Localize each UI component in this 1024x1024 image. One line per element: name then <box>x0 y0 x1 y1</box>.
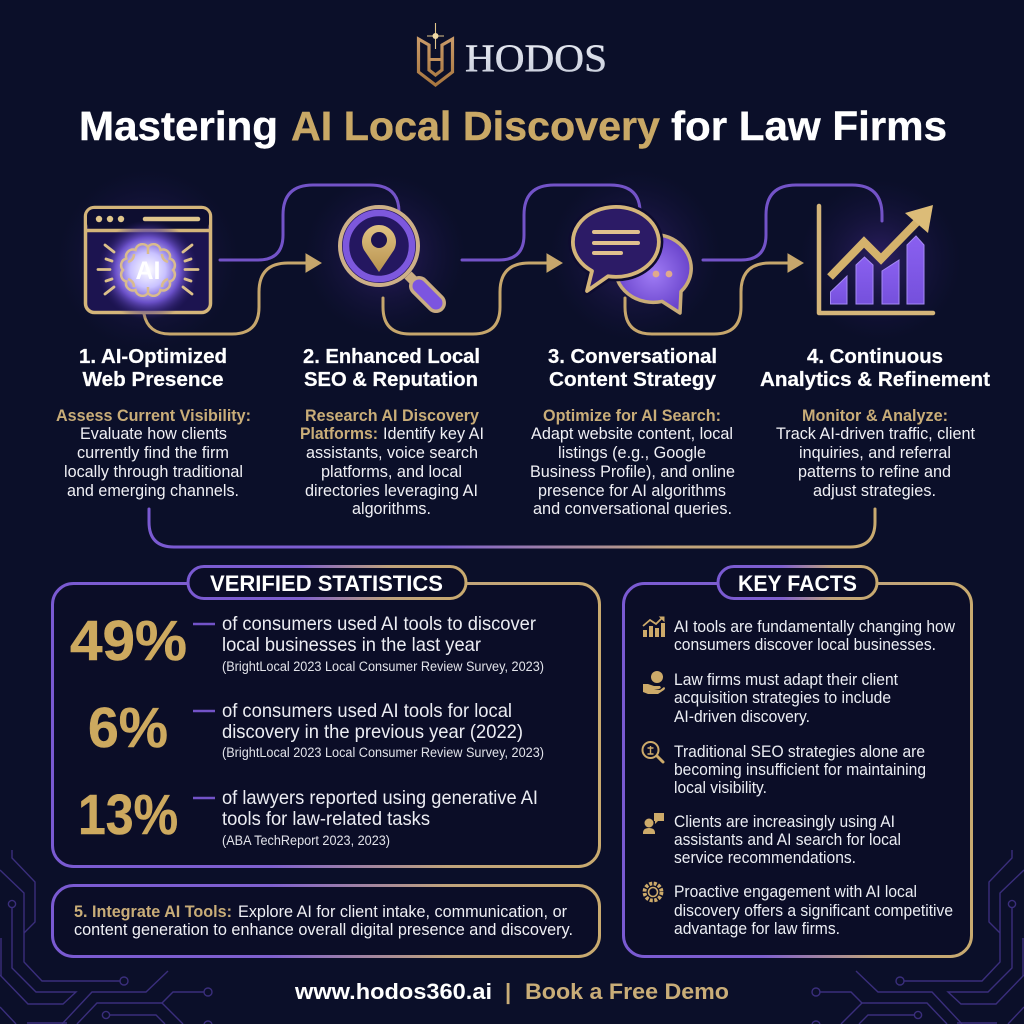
title: Mastering <box>79 103 278 149</box>
brand name: HODOS <box>465 37 607 80</box>
fact 1 <box>674 617 956 654</box>
stat: 6%: of consumers used AI tools for local <box>222 700 512 722</box>
description: patterns to refine and <box>798 462 951 481</box>
connector: bracket joining the steps <box>149 509 875 547</box>
heading pill <box>718 566 877 598</box>
fact 2: Law firms must adapt their client <box>674 670 898 689</box>
fact 1: AI tools are fundamentally changing how <box>674 617 956 636</box>
description: Adapt website content, local <box>531 424 733 443</box>
circuit pattern: right <box>812 850 1024 1024</box>
heading <box>79 345 227 391</box>
logo <box>418 23 607 85</box>
description: Research AI Discovery <box>305 406 480 425</box>
heading: SEO & Reputation <box>304 368 478 391</box>
fact 4: assistants and AI search for local <box>674 830 901 849</box>
description: Identify key AI <box>383 424 484 443</box>
heading pill: KEY FACTS <box>738 571 857 596</box>
icon: growth chart <box>819 205 933 313</box>
footer: Book a Free Demo <box>525 979 729 1004</box>
description: Assess Current Visibility: <box>56 406 251 425</box>
description: currently find the firm <box>77 443 229 462</box>
fact 3: Traditional SEO strategies alone are <box>674 742 925 761</box>
icon: magnifier with scales <box>642 742 663 762</box>
icon: magnifier with location pin <box>340 207 436 303</box>
stat: 49%: (BrightLocal 2023 Local Consumer Review Survey, 2023) <box>222 659 544 674</box>
fact 3: local visibility. <box>674 778 767 797</box>
footer: | <box>505 979 511 1004</box>
panel: integrate AI tools: Explore AI for client intake, communication, or <box>238 902 567 921</box>
heading <box>760 345 990 391</box>
icon: hand holding coin <box>643 671 665 694</box>
description: and conversational queries. <box>533 499 732 518</box>
description <box>300 406 484 518</box>
description: Platforms: <box>300 424 378 443</box>
circuit pattern: left <box>0 850 212 1024</box>
panel: verified statistics <box>52 566 600 866</box>
fact 5: Proactive engagement with AI local <box>674 882 917 901</box>
fact 4: service recommendations. <box>674 848 856 867</box>
description: listings (e.g., Google <box>558 443 706 462</box>
heading: Web Presence <box>82 368 224 391</box>
description <box>530 406 735 518</box>
stat: 49%: of consumers used AI tools to discover <box>222 613 536 635</box>
description: algorithms. <box>352 499 431 518</box>
step 2 text <box>300 345 484 518</box>
description: Monitor & Analyze: <box>802 406 948 425</box>
heading: Content Strategy <box>549 368 717 391</box>
heading pill <box>188 566 466 598</box>
icon: person with speech bubble <box>643 813 664 834</box>
panel: integrate AI tools: content generation to enhance overall digital presence and discovery. <box>74 920 573 939</box>
heading <box>548 345 717 391</box>
footer: www.hodos360.ai <box>294 979 492 1004</box>
heading: 2. Enhanced Local <box>303 345 480 368</box>
description: Track AI-driven traffic, client <box>776 424 975 443</box>
stat: 13%: of lawyers reported using generative AI <box>222 787 538 809</box>
step 3 text <box>530 345 735 518</box>
stat: 6%: (BrightLocal 2023 Local Consumer Review Survey, 2023) <box>222 745 544 760</box>
fact 1: consumers discover local businesses. <box>674 635 936 654</box>
stat: 13%: tools for law-related tasks <box>222 808 430 830</box>
heading: Analytics & Refinement <box>760 368 990 391</box>
stat: 13%: 13% <box>78 783 178 847</box>
fact 3 <box>674 742 926 797</box>
fact 3: becoming insufficient for maintaining <box>674 760 926 779</box>
icon glows <box>58 170 960 350</box>
icon: browser window with AI brain <box>86 208 210 320</box>
icon: browser window with AI brain: AI <box>136 257 160 285</box>
stat: 13%: (ABA TechReport 2023, 2023) <box>222 833 390 848</box>
icon: chat bubbles <box>573 207 691 313</box>
stat: 6% <box>88 696 544 760</box>
connector: step 2 to 3 <box>383 185 640 334</box>
fact 2: acquisition strategies to include <box>674 688 891 707</box>
description: Optimize for AI Search: <box>543 406 721 425</box>
icon: shield mark <box>418 23 452 85</box>
stat: 6%: discovery in the previous year (2022) <box>222 721 523 743</box>
description: locally through traditional <box>64 462 243 481</box>
step 4 text <box>760 345 990 500</box>
panel: integrate AI tools: 5. Integrate AI Tools: <box>74 902 232 921</box>
description: assistants, voice search <box>306 443 478 462</box>
icon: rising bars <box>643 617 665 637</box>
stat: 49%: 49% <box>70 609 187 673</box>
description: presence for AI algorithms <box>538 481 726 500</box>
heading: 4. Continuous <box>807 345 943 368</box>
stat: 6%: 6% <box>88 696 168 760</box>
fact 5 <box>674 882 953 938</box>
fact 2 <box>674 670 898 726</box>
fact 5: advantage for law firms. <box>674 919 840 938</box>
heading <box>303 345 480 391</box>
fact 5: discovery offers a significant competitive <box>674 901 953 920</box>
heading: 1. AI-Optimized <box>79 345 227 368</box>
stat: 49% <box>70 609 544 674</box>
panel: integrate AI tools <box>52 886 600 956</box>
title: AI Local Discovery <box>291 103 660 149</box>
description: adjust strategies. <box>813 481 936 500</box>
title: for Law Firms <box>671 103 947 149</box>
step 1 text <box>56 345 251 500</box>
icon: gear <box>644 884 662 900</box>
footer <box>294 979 729 1004</box>
description <box>56 406 251 500</box>
description: and emerging channels. <box>67 481 239 500</box>
fact 2: AI-driven discovery. <box>674 707 810 726</box>
heading: 3. Conversational <box>548 345 717 368</box>
heading pill: VERIFIED STATISTICS <box>210 571 443 596</box>
title <box>79 103 947 149</box>
description: Evaluate how clients <box>80 424 227 443</box>
description: platforms, and local <box>321 462 462 481</box>
stat: 49%: local businesses in the last year <box>222 634 481 656</box>
description: inquiries, and referral <box>799 443 951 462</box>
description <box>776 406 975 500</box>
fact 4 <box>674 812 901 867</box>
description: Business Profile), and online <box>530 462 735 481</box>
fact 4: Clients are increasingly using AI <box>674 812 895 831</box>
description: directories leveraging AI <box>305 481 478 500</box>
stat: 13% <box>78 783 538 848</box>
connector: step 1 to 2 <box>144 185 399 334</box>
connector: step 3 to 4 <box>625 185 882 334</box>
panel: key facts <box>624 566 972 956</box>
